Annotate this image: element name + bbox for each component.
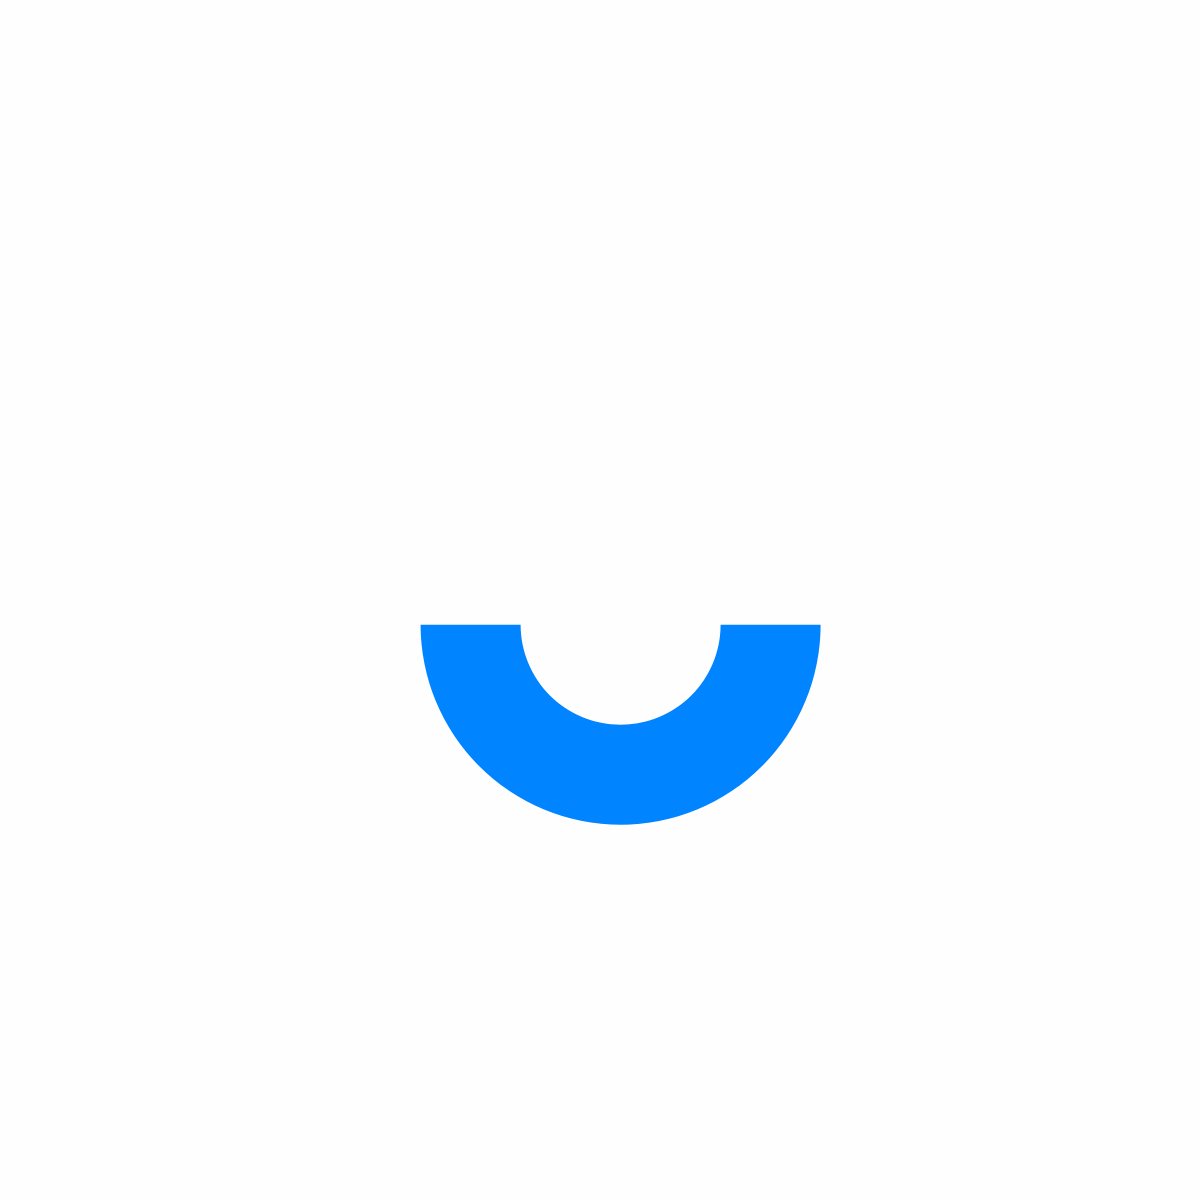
- half-ring shape: [421, 625, 821, 825]
